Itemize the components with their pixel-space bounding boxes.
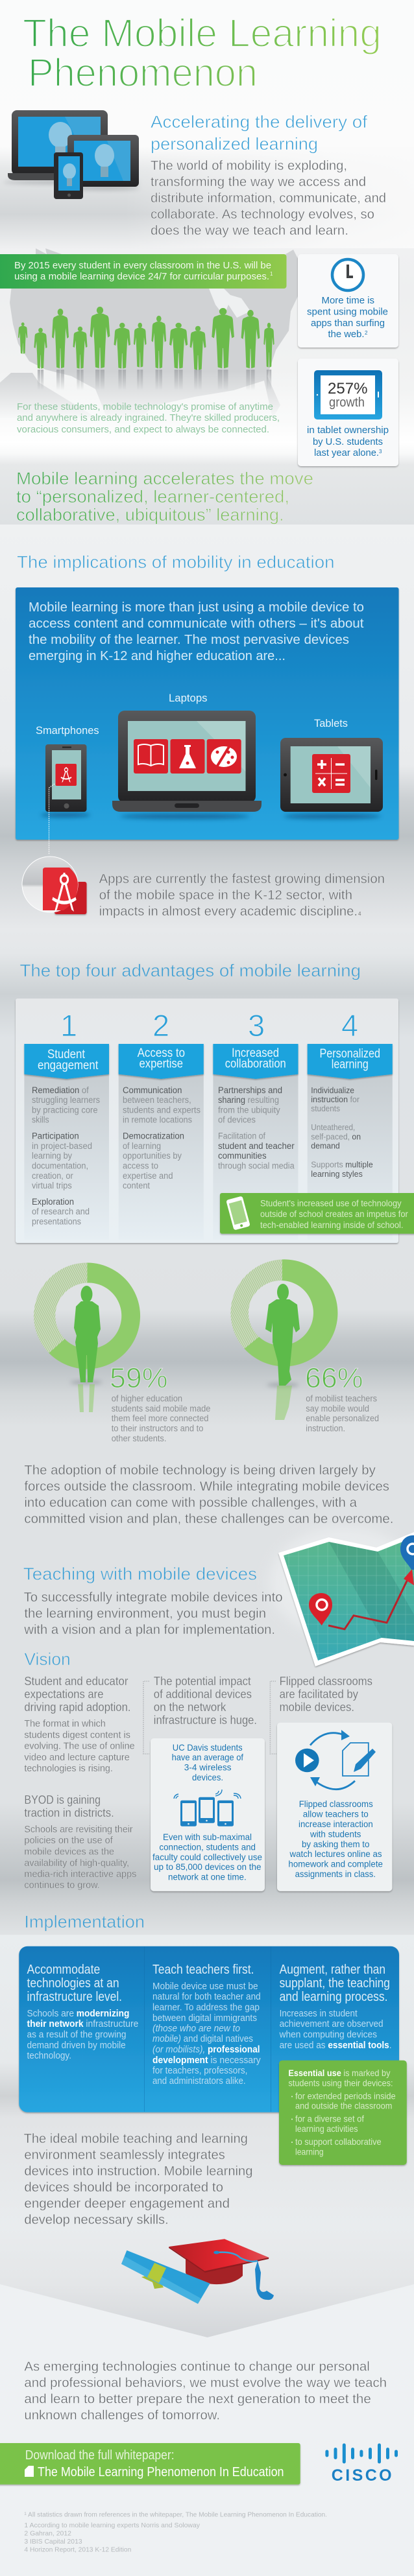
card: flipped classrooms: homework and complete	[288, 1859, 383, 1869]
column: accommodate technologies: Accommodate	[27, 1963, 100, 1977]
text block: ideal environment: environment seamlessly integrates	[24, 2147, 225, 2162]
column 1: student engagement: engagement	[38, 1059, 99, 1072]
card: UC Davis network stat: network at one time.	[168, 1872, 247, 1882]
footnotes	[24, 2511, 327, 2554]
text block: ideal environment: devices should be incorporated to	[24, 2180, 223, 2195]
heading: mobile learning accelerates: Mobile learning accelerates the move	[16, 469, 313, 488]
column: augment rather than supplant: achievement are observed	[280, 2018, 384, 2029]
callout: technology outside school: tech-enabled learning inside of school.	[260, 1220, 404, 1230]
column: teach teachers first: natural for both teacher and	[152, 1991, 261, 2002]
callout: technology outside school: Student's increased use of technology	[260, 1198, 402, 1209]
column 3: increased collaboration: Increased	[232, 1046, 279, 1060]
heading: implications: The implications of mobility in education	[17, 552, 335, 572]
card: flipped classrooms: watch lectures online as	[289, 1849, 382, 1859]
column 2: access to expertise: content	[123, 1181, 150, 1190]
callout: by 2015 green bar: 1	[270, 271, 273, 277]
text block: emerging technologies: As emerging technologies continue to change our personal	[24, 2359, 370, 2374]
icon: clock	[332, 259, 363, 290]
column 2: access to expertise: access to	[123, 1161, 158, 1171]
text block: integrate: with a vision and a plan for implementation.	[23, 1622, 275, 1637]
callout: by 2015 green bar: By 2015 every student in every classroom in the U.S. will be	[14, 261, 271, 271]
text block: apps: Apps are currently the fastest growing dimension	[99, 871, 385, 886]
stat: 66% of mobilist teachers: instruction.	[306, 1424, 345, 1434]
column: teach teachers first: mobile) and digital natives	[152, 2033, 253, 2044]
callout: by 2015 green bar: using a mobile learning device 24/7 for curricular purposes.	[14, 272, 269, 282]
text block: vision column 2: on the network	[154, 1701, 226, 1714]
column 1: student engagement: in project-based	[32, 1141, 92, 1151]
card: UC Davis network stat: Even with sub-maximal	[163, 1832, 252, 1842]
icon: tablet with 257% growth: growth	[329, 396, 365, 410]
column 3: increased collaboration: sharing resulting	[218, 1095, 279, 1105]
text block: vision column 1: expectations are	[24, 1688, 104, 1701]
stat: 59% of higher education students: students said mobile made	[112, 1404, 210, 1413]
icon: diploma	[121, 2251, 210, 2304]
text block: vision column 1: traction in districts.	[24, 1806, 114, 1819]
column 4: personalized learning: learning styles	[311, 1170, 363, 1179]
column: accommodate technologies: infrastructure level.	[27, 1990, 122, 2004]
column: teach teachers first: and administrators alike.	[152, 2075, 245, 2086]
column 2: access to expertise: students and experts	[123, 1105, 201, 1115]
stat card: mobile apps time: More time is	[322, 295, 374, 306]
panel: four advantages	[16, 998, 414, 1243]
stat: 59% of higher education students: them feel more connected	[112, 1413, 209, 1423]
column 2: access to expertise: expertise	[139, 1058, 183, 1071]
column 2: access to expertise: Democratization	[123, 1131, 184, 1141]
text block: adoption	[24, 1463, 393, 1526]
column 2: access to expertise: of learning	[123, 1141, 161, 1151]
text block: mobile learning definition	[29, 600, 364, 663]
icon: book tile	[134, 739, 168, 774]
stat card: mobile apps time: the web.	[328, 329, 365, 340]
column 4: personalized learning: Individualize	[311, 1086, 354, 1095]
icon: blue location pin	[400, 1535, 414, 1570]
column: accommodate technologies: demand driven by mobile	[27, 2040, 126, 2051]
column 4: personalized learning: Personalized	[319, 1047, 380, 1061]
heading: accelerating the delivery	[151, 112, 368, 154]
column 3: increased collaboration: of devices	[218, 1115, 256, 1125]
column: teach teachers first: between digital immigrants	[152, 2013, 257, 2024]
column 3: increased collaboration: through social media	[218, 1161, 295, 1171]
column 2: access to expertise: Communication	[123, 1085, 182, 1095]
column 1: student engagement	[24, 1008, 109, 1240]
text block: vision column 2: The potential impact	[154, 1675, 251, 1688]
column 1: student engagement: Exploration	[32, 1197, 74, 1207]
text block: for these students: For these students, mobile technology's promise of anytime	[17, 402, 273, 412]
card: UC Davis network stat: connection, students and	[159, 1842, 256, 1852]
column 2: access to expertise: opportunities by	[123, 1151, 182, 1161]
text block: mobile learning definition: the mobility of the learner. The most pervasive devices	[29, 632, 349, 647]
text block: integrate: the learning environment, you must begin	[24, 1606, 266, 1621]
column: teach teachers first: Mobile device use must be	[152, 1981, 258, 1992]
text block: ideal environment: devices into instruction. Mobile learning	[24, 2164, 253, 2179]
stat card: mobile apps time	[298, 254, 398, 348]
text block: apps: impacts in almost every academic discipline.	[99, 904, 358, 919]
logo: cisco	[325, 2443, 398, 2485]
icon: tablet with 257% growth: 257%	[328, 380, 367, 397]
map of the United States	[0, 248, 305, 420]
column 4: personalized learning: learning	[332, 1058, 369, 1072]
text block: vision column 1: media-rich interactive apps	[24, 1869, 136, 1880]
text block: intro: distribute information, communicate, and	[151, 191, 386, 206]
icon: palette tile	[207, 739, 241, 774]
column 1: student engagement: creation, or	[32, 1171, 73, 1181]
text block: vision column 1: availability of high-quality,	[24, 1858, 129, 1869]
column 2: access to expertise: between teachers,	[123, 1095, 191, 1105]
column 2: access to expertise: expertise and	[123, 1171, 173, 1181]
text block: intro: The world of mobility is exploding,	[151, 158, 347, 173]
column 1: student engagement: by practicing core	[32, 1105, 98, 1115]
callout: essential use: students using their devices:	[288, 2078, 393, 2088]
stat card: mobile apps time: 2	[365, 330, 368, 336]
stat: 59% of higher education students	[110, 1362, 210, 1443]
column 3: increased collaboration: Partnerships and	[218, 1085, 282, 1095]
column 2: access to expertise: in remote locations	[123, 1115, 192, 1125]
column 3: increased collaboration: collaboration	[225, 1058, 286, 1071]
heading: mobile learning accelerates: collaborative, ubiquitous” learning.	[16, 505, 284, 525]
column 3: increased collaboration: student and teacher	[218, 1141, 295, 1151]
text block: vision column 3: are facilitated by	[280, 1688, 358, 1701]
column: teach teachers first	[152, 1963, 261, 2086]
column: teach teachers first: development is necessary	[152, 2055, 261, 2066]
icon: smartphone with compass app	[41, 744, 90, 817]
column 3: increased collaboration: 3	[248, 1008, 265, 1043]
column 4: personalized learning: demand	[311, 1142, 340, 1151]
callout: essential use: learning activities	[295, 2123, 358, 2134]
column 1: student engagement: 1	[60, 1008, 77, 1043]
stat: 59% of higher education students: 59%	[110, 1362, 167, 1394]
icon: map with route and pins	[269, 1527, 414, 1666]
column 1: student engagement: learning by	[32, 1151, 72, 1161]
heading: top four advantages: The top four advantages of mobile learning	[19, 961, 361, 980]
text block: vision column 1: continues to grow.	[24, 1880, 100, 1891]
column 2: access to expertise: Access to	[138, 1046, 185, 1060]
text block: integrate	[23, 1590, 283, 1637]
footnotes: 2 Gahran, 2012	[24, 2530, 71, 2538]
text block: mobile learning definition: access content and communicate with others – it's about	[29, 616, 364, 631]
column: augment rather than supplant: Augment, rather than	[280, 1963, 385, 1977]
callout: essential use: for extended periods inside	[295, 2091, 396, 2101]
card: flipped classrooms: Flipped classrooms	[299, 1799, 373, 1809]
column: augment rather than supplant: and learning process.	[280, 1990, 388, 2004]
callout: essential use: to support collaborative	[295, 2136, 382, 2147]
stat card: 257% growth: by U.S. students	[313, 436, 383, 447]
column 1: student engagement: of research and	[32, 1207, 90, 1216]
card: UC Davis network stat: 3-4 wireless	[184, 1762, 231, 1773]
icon: student silhouette	[70, 1286, 103, 1412]
footnotes: ¹ All statistics drawn from references in the whitepaper, The Mobile Learning Phenomenon In Education.	[24, 2511, 327, 2519]
stat: 59% of higher education students: to their instructors and to	[112, 1424, 203, 1434]
column: teach teachers first: (or mobilists), professional	[152, 2044, 260, 2055]
dotted connector line	[49, 784, 55, 855]
icon: flipped cycle	[295, 1730, 376, 1790]
text block: apps	[99, 871, 385, 919]
title: The Mobile Learning	[23, 11, 382, 55]
text block: vision column 1: video and lecture capture	[24, 1752, 130, 1763]
icon: teacher silhouette	[265, 1284, 300, 1420]
card: UC Davis network stat	[151, 1738, 265, 1891]
callout: essential use: and outside the classroom	[295, 2101, 392, 2111]
text block: ideal environment: The ideal mobile teaching and learning	[24, 2131, 248, 2146]
heading: accelerating the delivery: personalized learning	[151, 134, 318, 154]
text block: adoption: The adoption of mobile technology is being driven largely by	[24, 1463, 376, 1478]
heading: accelerating the delivery: Accelerating the delivery of	[151, 112, 368, 132]
icon: phone	[226, 1196, 250, 1231]
footnotes: 4 Horizon Report, 2013 K-12 Edition	[24, 2546, 131, 2554]
column 4: personalized learning: self-paced, on	[311, 1133, 361, 1142]
text block: intro: does the way we teach and learn.	[151, 223, 348, 238]
callout: essential use: learning	[295, 2147, 324, 2157]
icon: document	[25, 2466, 34, 2477]
text block: vision column 1: BYOD is gaining	[24, 1793, 101, 1806]
column: teach teachers first: Teach teachers first.	[152, 1963, 254, 1977]
column: accommodate technologies: their network infrastructure	[27, 2018, 138, 2029]
link text: The Mobile Learning Phenomenon In Education	[38, 2465, 284, 2479]
card: flipped classrooms: increase interaction	[298, 1819, 373, 1829]
column: teach teachers first: learner. To address the gap	[152, 2002, 260, 2013]
stat card: 257% growth: 3	[379, 449, 382, 455]
column 1: student engagement: Participation	[32, 1131, 79, 1141]
footnotes: 1 According to mobile learning experts Norris and Soloway	[24, 2522, 201, 2529]
text block: emerging technologies: and learn to better prepare the next generation to meet the	[24, 2392, 371, 2407]
text block: vision column 1: technologies is rising.	[24, 1763, 113, 1774]
column 4: personalized learning: instruction for	[311, 1095, 359, 1104]
stat card: 257% growth	[298, 359, 398, 466]
card: flipped classrooms: with students	[310, 1829, 361, 1839]
text block: vision column 1: students digest content is	[24, 1730, 130, 1741]
text block: apps: of the mobile space in the K-12 sector, with	[99, 888, 352, 903]
column 1: student engagement: Student	[47, 1048, 86, 1061]
column 3: increased collaboration	[213, 1008, 298, 1240]
card: UC Davis network stat: have an average of	[172, 1752, 243, 1762]
icon: laptop, tablet and phone with light bulbs	[3, 110, 140, 199]
column: accommodate technologies	[27, 1963, 138, 2061]
column 3: increased collaboration: communities	[218, 1151, 267, 1161]
icon: mortarboard	[169, 2239, 274, 2300]
column: augment rather than supplant: supplant, the teaching	[280, 1976, 390, 1991]
text block: ideal environment	[24, 2131, 252, 2227]
button: download whitepaper: Download the full whitepaper:	[25, 2448, 175, 2463]
stat: 66% of mobilist teachers: say mobile would	[306, 1404, 369, 1413]
column: augment rather than supplant: when computing devices	[279, 2029, 377, 2040]
text block: vision column 2: infrastructure is huge.	[154, 1714, 257, 1727]
text block: mobile learning definition: emerging in K-12 and higher education are...	[29, 648, 286, 663]
chart: 59% donut	[34, 1262, 140, 1412]
chevron divider	[0, 2284, 414, 2337]
column 4: personalized learning: students	[311, 1104, 340, 1113]
column: teach teachers first: (those who are new to	[152, 2023, 240, 2034]
text block: vision column 2: of additional devices	[154, 1688, 252, 1701]
column 3: increased collaboration: Facilitation of	[218, 1131, 265, 1141]
text block: vision column 1: The format in which	[24, 1718, 106, 1729]
text block: intro: collaborate. As technology evolves, so	[151, 207, 374, 222]
text block: emerging technologies	[24, 2359, 387, 2423]
text block: vision column 2	[154, 1675, 257, 1727]
callout: essential use: Essential use is marked by	[288, 2068, 391, 2078]
column: accommodate technologies: technology.	[27, 2050, 71, 2061]
text block: vision column 1	[24, 1675, 136, 1891]
column 4: personalized learning	[308, 1008, 393, 1240]
stat: 59% of higher education students: of higher education	[112, 1394, 182, 1404]
footnotes: 3 IBIS Capital 2013	[24, 2538, 82, 2546]
title	[23, 11, 382, 95]
column: augment rather than supplant: are used as essential tools.	[280, 2040, 392, 2051]
text block: emerging technologies: unknown challenges of tomorrow.	[24, 2408, 220, 2423]
stat card: mobile apps time: spent using mobile	[307, 307, 388, 318]
text block: intro: transforming the way we access and	[151, 174, 366, 189]
text block: ideal environment: develop necessary skills.	[24, 2212, 169, 2227]
callout: technology outside school	[220, 1193, 414, 1234]
logo: cisco: CISCO	[332, 2466, 392, 2485]
label: laptops: Laptops	[169, 692, 208, 704]
stat: 66% of mobilist teachers: enable personalized	[306, 1413, 379, 1423]
icon: red location pin	[309, 1593, 332, 1625]
text block: vision column 1: Schools are revisiting their	[24, 1824, 133, 1835]
callout: essential use	[279, 2061, 407, 2165]
heading: mobile learning accelerates	[16, 469, 313, 525]
column: accommodate technologies: as a result of the growing	[27, 2029, 126, 2040]
stat: 66% of mobilist teachers: 66%	[305, 1362, 363, 1394]
card: flipped classrooms: allow teachers to	[303, 1809, 369, 1819]
label: tablets: Tablets	[314, 718, 348, 729]
text block: vision column 3: Flipped classrooms	[280, 1675, 372, 1688]
text block: for these students: and anywhere is already ingrained. They're skilled producers,	[17, 413, 280, 423]
stat card: 257% growth: in tablet ownership	[307, 425, 389, 436]
card: UC Davis network stat: devices.	[192, 1772, 223, 1782]
text block: adoption: committed vision and plan, these challenges can be overcome.	[24, 1511, 393, 1526]
icon: tablet with calculator app	[280, 738, 383, 819]
stat card: mobile apps time: apps than surfing	[311, 318, 385, 329]
chart: 66% donut	[230, 1259, 337, 1420]
column 2: access to expertise: 2	[152, 1008, 169, 1043]
panel: implementation	[19, 1946, 399, 2112]
text block: integrate: To successfully integrate mobile devices into	[24, 1590, 282, 1605]
column 1: student engagement: documentation,	[32, 1161, 88, 1171]
stat: 66% of mobilist teachers: of mobilist teachers	[306, 1394, 377, 1404]
text block: vision column 3: mobile devices.	[280, 1701, 354, 1714]
card: UC Davis network stat: up to 85,000 devices on the	[154, 1861, 262, 1872]
stat card: 257% growth: last year alone.	[314, 447, 379, 458]
card: flipped classrooms: by asking them to	[302, 1839, 370, 1849]
column 4: personalized learning: Unteathered,	[311, 1123, 355, 1132]
students silhouettes	[18, 307, 274, 390]
text block: vision column 1: policies on the use of	[24, 1835, 114, 1846]
heading: mobile learning accelerates: to “personalized, learner-centered,	[16, 487, 289, 506]
icon: three phones with wifi	[174, 1790, 241, 1826]
text block: vision column 1: Student and educator	[24, 1675, 128, 1688]
column: augment rather than supplant	[279, 1963, 392, 2051]
column 3: increased collaboration: from the ubiquity	[218, 1105, 280, 1115]
text block: for these students: voracious consumers, and expect to always be connected.	[17, 425, 269, 435]
text block: apps: 4	[358, 911, 361, 917]
icon: graduation cap and diploma	[121, 2239, 274, 2304]
column 1: student engagement: struggling learners	[32, 1095, 100, 1105]
icon: flask tile	[170, 739, 205, 774]
column: augment rather than supplant: Increases in student	[280, 2008, 358, 2019]
text block: for these students	[17, 402, 280, 435]
icon: compass app under magnifier	[22, 857, 87, 914]
card: UC Davis network stat: faculty could collectively use	[152, 1852, 262, 1862]
card: flipped classrooms	[277, 1723, 392, 1891]
text block: vision column 1: mobile devices as the	[24, 1847, 114, 1858]
text block: emerging technologies: and professional behaviors, we must evolve the way we teach	[24, 2376, 387, 2391]
stat: 66% of mobilist teachers	[305, 1362, 379, 1434]
text block: vision column 1: evolving. The use of online	[24, 1741, 135, 1752]
button: download whitepaper	[0, 2443, 300, 2485]
icon: laptop with subject apps	[112, 711, 262, 819]
heading: teaching with mobile devices: Teaching with mobile devices	[23, 1565, 257, 1584]
icon: tablet with 257% growth	[314, 370, 382, 419]
stat: 59% of higher education students: other students.	[112, 1434, 166, 1443]
text block: vision column 1: driving rapid adoption.	[24, 1701, 131, 1714]
title: Phenomenon	[28, 51, 258, 95]
label: smartphones: Smartphones	[36, 725, 99, 737]
card: UC Davis network stat: UC Davis students	[173, 1742, 243, 1753]
column: teach teachers first: for teachers, professors,	[152, 2065, 247, 2076]
callout: essential use: for a diverse set of	[295, 2114, 364, 2124]
heading: implementation: Implementation	[24, 1912, 145, 1932]
text block: mobile learning definition: Mobile learning is more than just using a mobile device to	[29, 600, 364, 615]
text block: adoption: forces outside the classroom. While integrating mobile devices	[24, 1479, 389, 1494]
column 4: personalized learning: 4	[341, 1008, 358, 1043]
text block: intro	[151, 158, 386, 238]
card: flipped classrooms: assignments in class.	[295, 1869, 376, 1879]
text block: ideal environment: engender deeper engagement and	[24, 2196, 230, 2211]
callout: by 2015 green bar	[0, 254, 287, 289]
column 2: access to expertise	[119, 1008, 204, 1240]
column 1: student engagement: Remediation of	[32, 1085, 89, 1095]
column 1: student engagement: virtual trips	[32, 1181, 72, 1190]
text block: vision column 3	[280, 1675, 372, 1714]
panel: implications	[16, 587, 398, 840]
text block: adoption: into education can come with possible challenges, with a	[24, 1495, 358, 1510]
heading: vision: Vision	[24, 1649, 71, 1669]
column: accommodate technologies: technologies at an	[27, 1976, 119, 1991]
column 1: student engagement: skills	[32, 1115, 49, 1125]
column 4: personalized learning: Supports multiple	[311, 1161, 373, 1170]
column 1: student engagement: presentations	[32, 1217, 81, 1227]
column: accommodate technologies: Schools are modernizing	[27, 2008, 129, 2019]
